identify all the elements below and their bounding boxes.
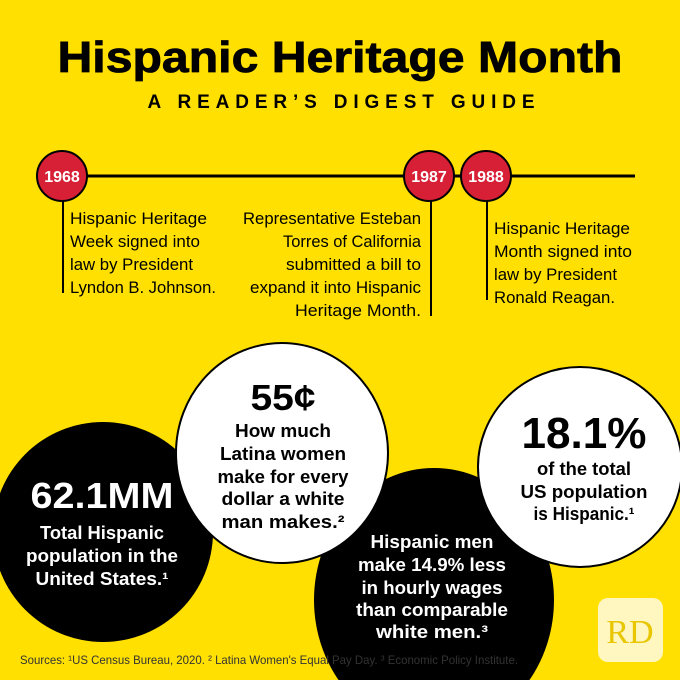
stat circle: 14.9%: white men.³ bbox=[375, 622, 488, 642]
stat circle: 62.1MM: 62.1MM bbox=[30, 475, 174, 516]
stat circle: 55¢: man makes.² bbox=[222, 512, 344, 532]
stat circle: 62.1MM bbox=[0, 422, 213, 642]
stat circle: 62.1MM: population in the bbox=[26, 546, 178, 566]
text: 1988 event bbox=[494, 219, 632, 307]
text: 1968 event bbox=[70, 209, 216, 297]
text: 1987 event: Heritage Month. bbox=[295, 301, 421, 320]
marker: 1968: 1968 bbox=[44, 169, 80, 186]
stat circle: 62.1MM: United States.¹ bbox=[36, 569, 168, 589]
marker: 1987 bbox=[404, 151, 454, 201]
stat circle: 18.1%: is Hispanic.¹ bbox=[534, 504, 635, 524]
text: 1987 event: expand it into Hispanic bbox=[250, 278, 421, 297]
text: 1987 event bbox=[243, 209, 422, 320]
text: 1987 event: Torres of California bbox=[283, 232, 422, 251]
text: 1988 event: Ronald Reagan. bbox=[494, 288, 615, 307]
text: 1987 event: submitted a bill to bbox=[286, 255, 421, 274]
stat circle: 14.9%: than comparable bbox=[356, 600, 508, 620]
text: 1968 event: law by President bbox=[70, 255, 193, 274]
text: 1968 event: Lyndon B. Johnson. bbox=[70, 278, 216, 297]
text: 1988 event: law by President bbox=[494, 265, 617, 284]
text: 1987 event: Representative Esteban bbox=[243, 209, 421, 228]
marker: 1988 bbox=[461, 151, 511, 201]
stat circle: 18.1% bbox=[478, 367, 680, 567]
marker: 1968 bbox=[37, 151, 87, 201]
stat circle: 14.9%: make 14.9% less bbox=[358, 555, 506, 575]
marker: 1987: 1987 bbox=[411, 169, 447, 186]
stat circle: 55¢: How much bbox=[235, 421, 331, 441]
stat circle: 14.9%: Hispanic men bbox=[370, 532, 494, 552]
text: 1968 event: Hispanic Heritage bbox=[70, 209, 207, 228]
marker: 1988: 1988 bbox=[468, 169, 504, 186]
stat circle: 55¢: 55¢ bbox=[250, 377, 316, 418]
stat circle: 62.1MM: Total Hispanic bbox=[40, 523, 164, 543]
logo: RD: RD bbox=[606, 614, 654, 651]
subtitle: A READER’S DIGEST GUIDE bbox=[148, 92, 534, 113]
timeline bbox=[37, 151, 635, 316]
sources: Sources: ¹US Census Bureau, 2020. ² Latina Women's Equal Pay Day. ³ Economic Policy Institute. bbox=[20, 653, 518, 667]
title: Hispanic Heritage Month bbox=[58, 33, 622, 82]
text: 1988 event: Hispanic Heritage bbox=[494, 219, 630, 238]
stat circle: 18.1%: US population bbox=[520, 482, 648, 502]
logo: RD bbox=[598, 598, 663, 662]
stat circle: 14.9% bbox=[314, 468, 554, 680]
text: 1968 event: Week signed into bbox=[70, 232, 200, 251]
stat circle: 55¢ bbox=[176, 343, 388, 563]
stat circle: 55¢: Latina women bbox=[220, 444, 346, 464]
stat circle: 14.9%: in hourly wages bbox=[362, 578, 502, 598]
stat circle: 55¢: make for every bbox=[218, 467, 348, 487]
stat circle: 18.1%: of the total bbox=[537, 459, 631, 479]
text: 1988 event: Month signed into bbox=[494, 242, 632, 261]
stat circle: 18.1%: 18.1% bbox=[522, 409, 646, 458]
stat circle: 55¢: dollar a white bbox=[222, 489, 344, 509]
